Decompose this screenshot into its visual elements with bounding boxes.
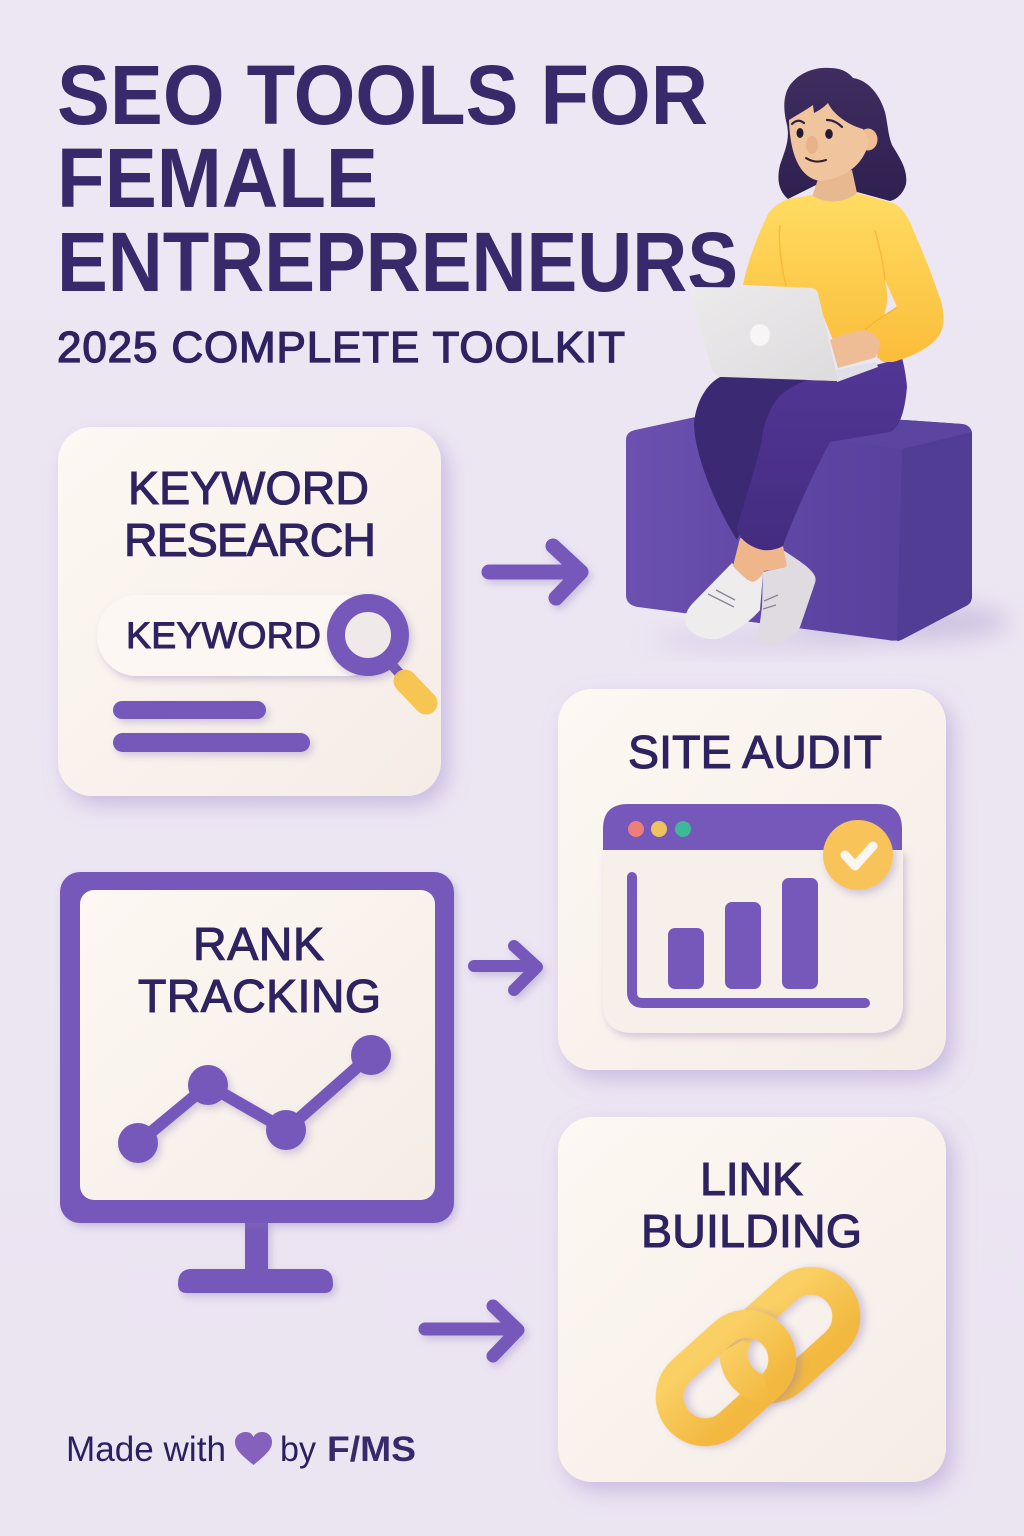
hand bbox=[830, 330, 880, 368]
subtitle: 2025 COMPLETE TOOLKIT bbox=[57, 323, 625, 372]
panel: rank tracking monitor bbox=[60, 872, 454, 1293]
text placeholder lines bbox=[113, 701, 310, 752]
eyebrows bbox=[792, 120, 842, 127]
panel: site audit bbox=[558, 689, 946, 1070]
ankles bbox=[733, 538, 787, 582]
arrow: rank tracking to site audit bbox=[474, 946, 537, 990]
search pill bbox=[97, 595, 387, 676]
icon: chain link bbox=[655, 1266, 861, 1447]
title: ENTREPRENEURS bbox=[57, 215, 738, 309]
footer credit bbox=[66, 1430, 416, 1469]
panel: link building bbox=[558, 1117, 946, 1482]
icon: magnifying glass bbox=[336, 603, 426, 703]
heading: rank tracking: RANK bbox=[193, 918, 324, 970]
nose bbox=[806, 136, 818, 154]
window dots bbox=[628, 821, 691, 837]
sweater bbox=[743, 193, 944, 362]
heading: link building: LINK bbox=[700, 1153, 803, 1205]
line chart bbox=[118, 1035, 391, 1163]
illustration: woman with laptop on purple cube bbox=[626, 68, 1010, 650]
footer credit: F/MS bbox=[327, 1430, 416, 1469]
heading: rank tracking bbox=[138, 918, 381, 1022]
monitor frame bbox=[60, 872, 454, 1223]
ear bbox=[858, 128, 878, 150]
footer credit: by bbox=[280, 1430, 316, 1469]
monitor screen bbox=[80, 890, 435, 1200]
title bbox=[57, 48, 738, 309]
mouth bbox=[806, 158, 826, 162]
heading: rank tracking: TRACKING bbox=[138, 970, 381, 1022]
bar chart bbox=[632, 877, 865, 1003]
hair bbox=[778, 68, 906, 201]
neck bbox=[812, 170, 857, 204]
floor shadow bbox=[650, 630, 870, 650]
heading: keyword research bbox=[124, 462, 376, 566]
icon: check badge bbox=[823, 820, 893, 890]
heading: keyword research: RESEARCH bbox=[124, 514, 376, 566]
heading: link building: BUILDING bbox=[641, 1205, 862, 1257]
arrow: rank tracking to link building bbox=[425, 1306, 518, 1356]
right shoe bbox=[758, 550, 816, 647]
left shoe bbox=[685, 563, 763, 639]
heading: link building bbox=[641, 1153, 862, 1257]
title: FEMALE bbox=[57, 131, 378, 225]
heading: keyword research: KEYWORD bbox=[128, 462, 369, 514]
heading: site audit: SITE AUDIT bbox=[628, 726, 882, 778]
purple cube seat bbox=[626, 416, 972, 641]
panel: keyword research bbox=[58, 427, 441, 796]
footer credit: Made with bbox=[66, 1430, 226, 1469]
title: SEO TOOLS FOR bbox=[57, 48, 708, 142]
arrow: keyword research to illustration bbox=[489, 546, 581, 598]
laptop bbox=[690, 287, 878, 382]
shoe laces bbox=[708, 590, 778, 609]
icon: heart bbox=[235, 1432, 272, 1465]
face bbox=[789, 103, 869, 181]
pants bbox=[694, 358, 907, 550]
cube shadow bbox=[790, 602, 1010, 642]
browser window bbox=[603, 804, 903, 1033]
eyes bbox=[796, 128, 833, 139]
monitor stand bbox=[178, 1220, 333, 1293]
search term: KEYWORD bbox=[126, 614, 321, 656]
